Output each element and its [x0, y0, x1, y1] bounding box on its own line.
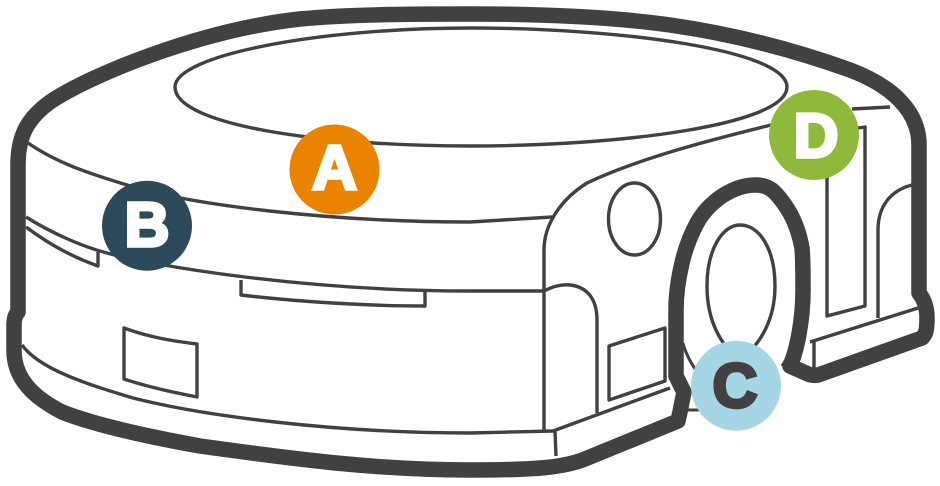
- rear bumper seam: [812, 342, 816, 368]
- front slot: [241, 280, 425, 306]
- badge B: B: [125, 191, 169, 260]
- top panel ellipse: [175, 28, 787, 146]
- middle body line: [26, 217, 543, 291]
- wheel bottom edges: [683, 343, 792, 410]
- rear top line: [852, 107, 890, 109]
- rear bumper line: [810, 308, 918, 342]
- front square: [609, 328, 665, 400]
- rear rectangle panel: [827, 127, 865, 316]
- fender inner arc: [544, 285, 597, 413]
- badge A: A: [312, 134, 357, 203]
- upper body line: [28, 143, 552, 222]
- bumper seam: [555, 431, 556, 456]
- rear arc line: [878, 185, 912, 318]
- front window: [124, 328, 197, 397]
- badge D: [769, 90, 859, 180]
- wheel hub: [707, 225, 775, 360]
- badge C: C: [713, 352, 757, 421]
- badge D: D: [794, 102, 838, 171]
- badge A: [290, 124, 380, 214]
- badge C: [691, 341, 781, 431]
- badge B: [102, 181, 192, 271]
- left slot: [26, 227, 98, 266]
- front fender line: [544, 124, 775, 430]
- sensor circle: [608, 183, 660, 255]
- lower body line: [22, 345, 670, 433]
